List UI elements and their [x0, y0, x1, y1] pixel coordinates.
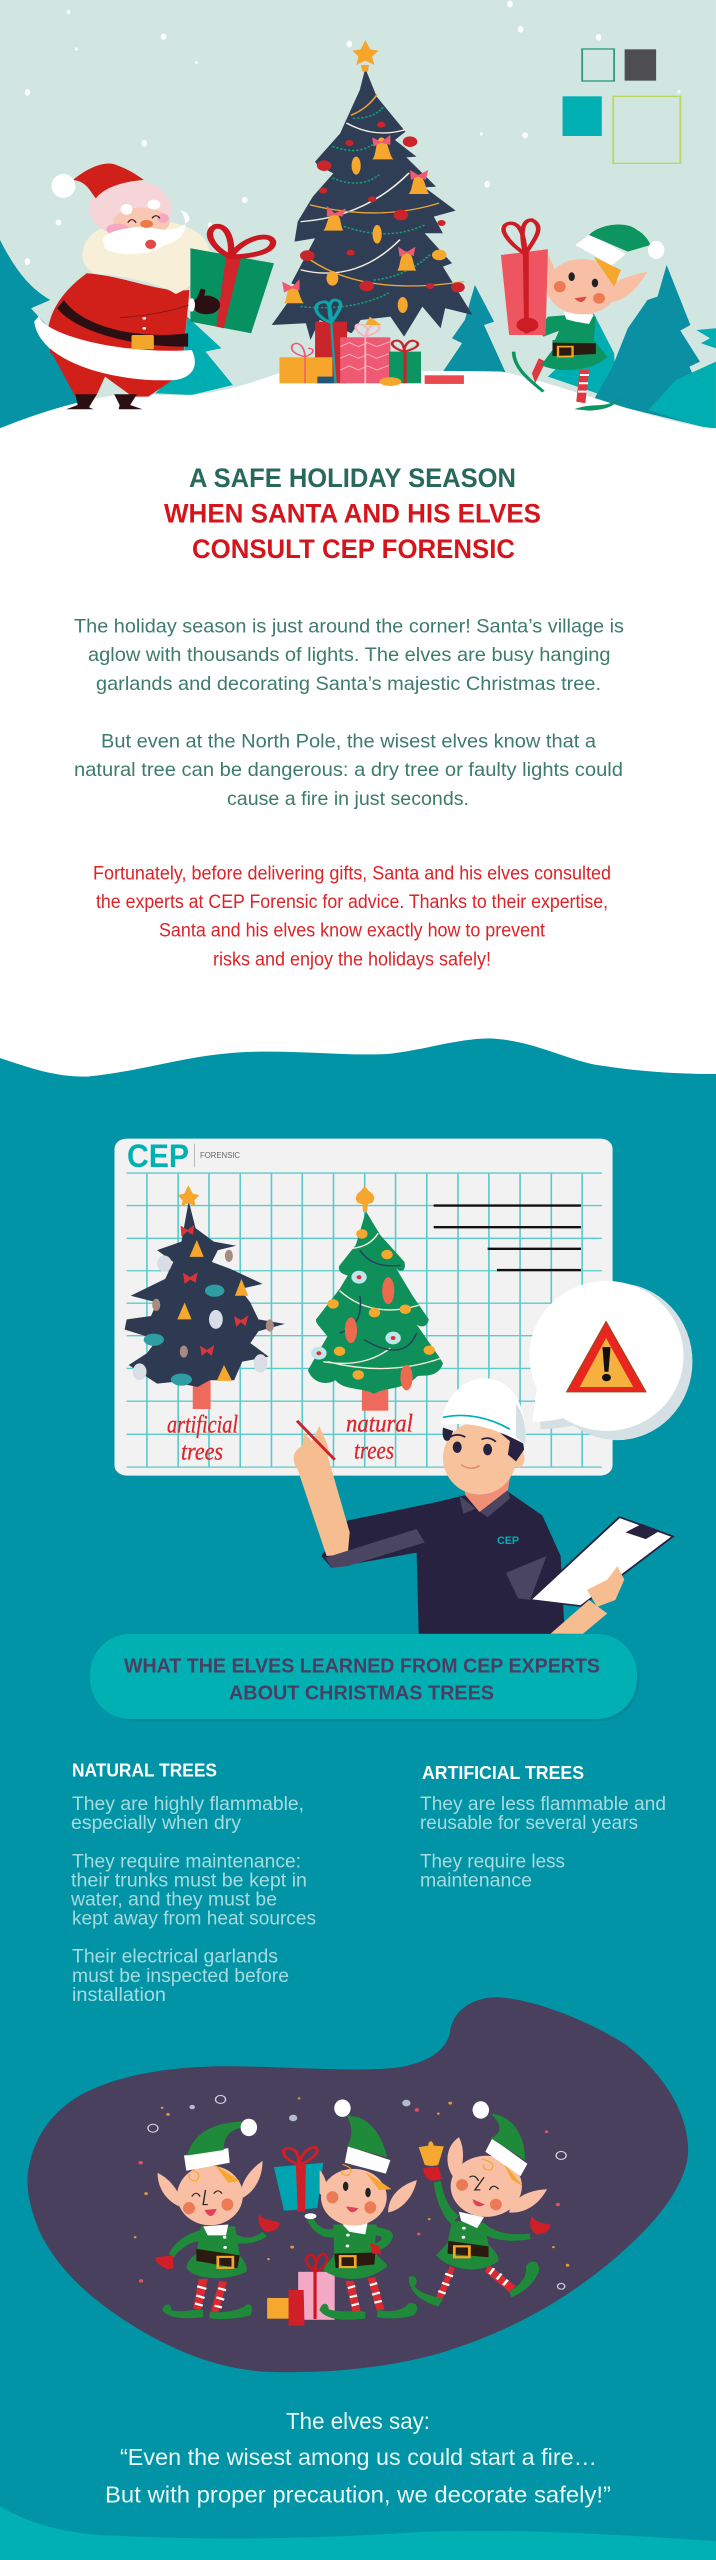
logo: forensic: FORENSIC — [200, 1151, 240, 1160]
intro text block: natural tree can be dangerous: a dry tree or faulty lights could — [74, 759, 623, 781]
icon: Santa Claus — [34, 164, 274, 409]
natural trees list: Their electrical garlands — [72, 1947, 278, 1968]
red text block: Fortunately, before delivering gifts, Santa and his elves consulted — [93, 863, 611, 884]
icon: artificial tree — [125, 1185, 285, 1409]
icon: elf one — [155, 2119, 279, 2319]
grid — [127, 1173, 602, 1467]
icon: natural tree — [308, 1186, 443, 1411]
heading: CONSULT CEP FORENSIC — [192, 534, 515, 564]
intro text block: cause a fire in just seconds. — [227, 788, 469, 810]
natural trees list: installation — [72, 1985, 166, 2006]
label: natural trees: trees — [354, 1438, 394, 1465]
bottom wave — [0, 2506, 716, 2560]
natural trees list: their trunks must be kept in — [71, 1871, 307, 1892]
closing quote text: “Even the wisest among us could start a fire… — [120, 2444, 597, 2470]
icon: gifts under the tree — [279, 300, 464, 386]
natural trees list: kept away from heat sources — [72, 1909, 316, 1930]
natural trees list: They require maintenance: — [72, 1851, 301, 1872]
snow ground — [0, 371, 716, 450]
natural trees list: They are highly flammable, — [72, 1794, 304, 1815]
heading: lessons — [124, 1655, 600, 1705]
red text block: risks and enjoy the holidays safely! — [213, 950, 491, 971]
panel: elves blob illustration — [27, 1997, 688, 2372]
label: natural trees: natural — [346, 1411, 413, 1438]
closing quote text — [105, 2408, 611, 2508]
panel: lessons heading pill — [90, 1634, 639, 1721]
logo divider — [193, 1144, 195, 1167]
closing quote text: The elves say: — [286, 2408, 430, 2434]
shirt logo: CEP: CEP — [497, 1535, 519, 1547]
stars and confetti — [134, 2095, 569, 2289]
icon: warning triangle — [566, 1321, 646, 1392]
heading: natural trees: NATURAL TREES — [72, 1761, 217, 1781]
icon: CEP expert with clipboard — [294, 1378, 673, 1634]
heading — [164, 463, 541, 564]
heading: artificial trees: ARTIFICIAL TREES — [422, 1763, 584, 1783]
natural trees list: water, and they must be — [70, 1890, 277, 1911]
heading: WHEN SANTA AND HIS ELVES — [164, 498, 541, 528]
intro text block: But even at the North Pole, the wisest elves know that a — [101, 730, 596, 752]
logo: CEP: CEP — [127, 1138, 189, 1174]
hero illustration panel — [0, 0, 716, 450]
decorative squares — [563, 49, 680, 163]
heading: lessons: WHAT THE ELVES LEARNED FROM CEP EXPERTS — [124, 1655, 600, 1677]
natural trees list: especially when dry — [71, 1813, 242, 1834]
snowflakes — [25, 1, 680, 265]
icon: elf three with bell — [409, 2101, 550, 2306]
red text block — [93, 863, 611, 971]
natural trees list — [70, 1794, 316, 2006]
intro text block — [74, 616, 624, 810]
closing quote text: But with proper precaution, we decorate safely!” — [105, 2482, 611, 2508]
heading: lessons: ABOUT CHRISTMAS TREES — [229, 1683, 494, 1705]
panel: whiteboard — [114, 1138, 613, 1476]
icon: decorated Christmas tree — [272, 40, 473, 340]
red text block: the experts at CEP Forensic for advice. Thanks to their expertise, — [96, 892, 608, 913]
artificial trees list: They are less flammable and — [420, 1794, 666, 1815]
heading: A SAFE HOLIDAY SEASON — [189, 463, 516, 493]
callout: warning speech bubble — [529, 1281, 692, 1440]
artificial trees list: maintenance — [420, 1871, 532, 1892]
artificial trees list: They require less — [420, 1851, 565, 1872]
intro text block: aglow with thousands of lights. The elves are busy hanging — [88, 644, 610, 666]
intro text block: The holiday season is just around the corner! Santa’s village is — [74, 616, 624, 638]
label: artificial trees — [167, 1412, 238, 1466]
intro text block: garlands and decorating Santa’s majestic Christmas tree. — [96, 673, 601, 695]
black text lines — [434, 1206, 581, 1270]
icon: gifts — [267, 2254, 335, 2326]
teal wave background — [0, 1038, 716, 2560]
natural trees list: must be inspected before — [72, 1966, 289, 1987]
icon: elf two with gift — [274, 2099, 417, 2320]
background pine trees — [0, 240, 716, 430]
icon: elf holding gift — [501, 220, 664, 411]
text block: natural trees — [70, 1761, 316, 2006]
artificial trees list — [420, 1794, 666, 1892]
artificial trees list: reusable for several years — [420, 1813, 638, 1834]
label: artificial trees: trees — [181, 1439, 223, 1466]
label: artificial trees: artificial — [167, 1412, 238, 1439]
label: natural trees — [346, 1411, 413, 1465]
red text block: Santa and his elves know exactly how to prevent — [159, 920, 546, 942]
text block: artificial trees — [420, 1763, 666, 1892]
